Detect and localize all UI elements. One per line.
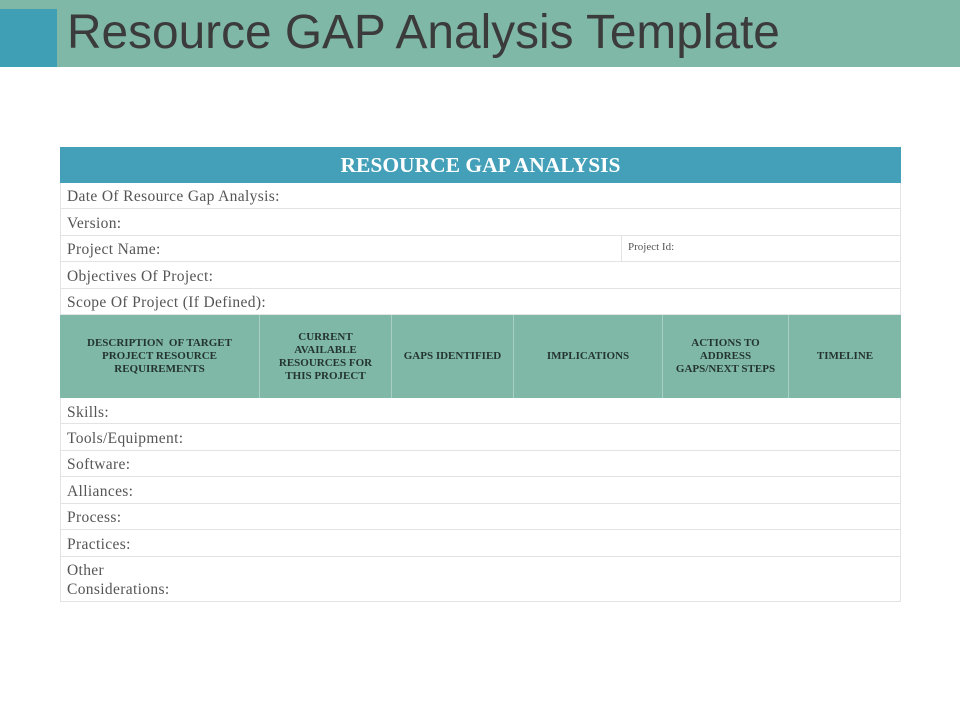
project id cell [621,236,674,261]
header accent square [0,9,57,67]
row: practices: Practices: [67,536,131,553]
column header row: REQUIREMENTS [114,363,205,375]
column header row: GAPS IDENTIFIED [404,350,501,362]
row: skills [60,398,901,424]
column header row: PROJECT RESOURCE [102,350,217,362]
row: software: Software: [67,456,130,473]
header bar [0,0,960,67]
row: date [60,183,901,209]
table title bar [60,147,901,183]
row: process [60,504,901,530]
row: scope [60,289,901,315]
table title bar: RESOURCE GAP ANALYSIS [340,153,620,177]
row: practices [60,530,901,557]
column header row: RESOURCES FOR [279,356,372,368]
column header row: THIS PROJECT [285,370,366,382]
column header row [60,315,901,398]
column header row: IMPLICATIONS [547,350,629,362]
project id cell: Project Id: [628,241,674,253]
column header row: CURRENT [298,330,353,342]
row: other considerations [60,557,901,602]
title: Resource GAP Analysis Template [67,6,780,59]
row: version: Version: [67,215,121,232]
row: scope: Scope Of Project (If Defined): [67,294,266,311]
row: other considerations: Considerations: [67,581,170,598]
row: tools [60,424,901,451]
row: project name [60,236,901,262]
column header row: ADDRESS [700,350,751,362]
row: objectives: Objectives Of Project: [67,268,213,285]
row: other considerations: Other [67,562,104,579]
row: version [60,209,901,236]
column header row: TIMELINE [817,350,873,362]
row: objectives [60,262,901,289]
row: project name: Project Name: [67,241,161,258]
column header row: ACTIONS TO [691,337,760,349]
row: process: Process: [67,509,121,526]
row: software [60,451,901,477]
row: alliances [60,477,901,504]
column header row: GAPS/NEXT STEPS [676,363,775,375]
column header row: AVAILABLE [294,344,357,356]
row: alliances: Alliances: [67,483,133,500]
row: skills: Skills: [67,404,109,421]
row: date: Date Of Resource Gap Analysis: [67,188,280,205]
row: tools: Tools/Equipment: [67,430,183,447]
column header row: DESCRIPTION OF TARGET [87,337,232,349]
